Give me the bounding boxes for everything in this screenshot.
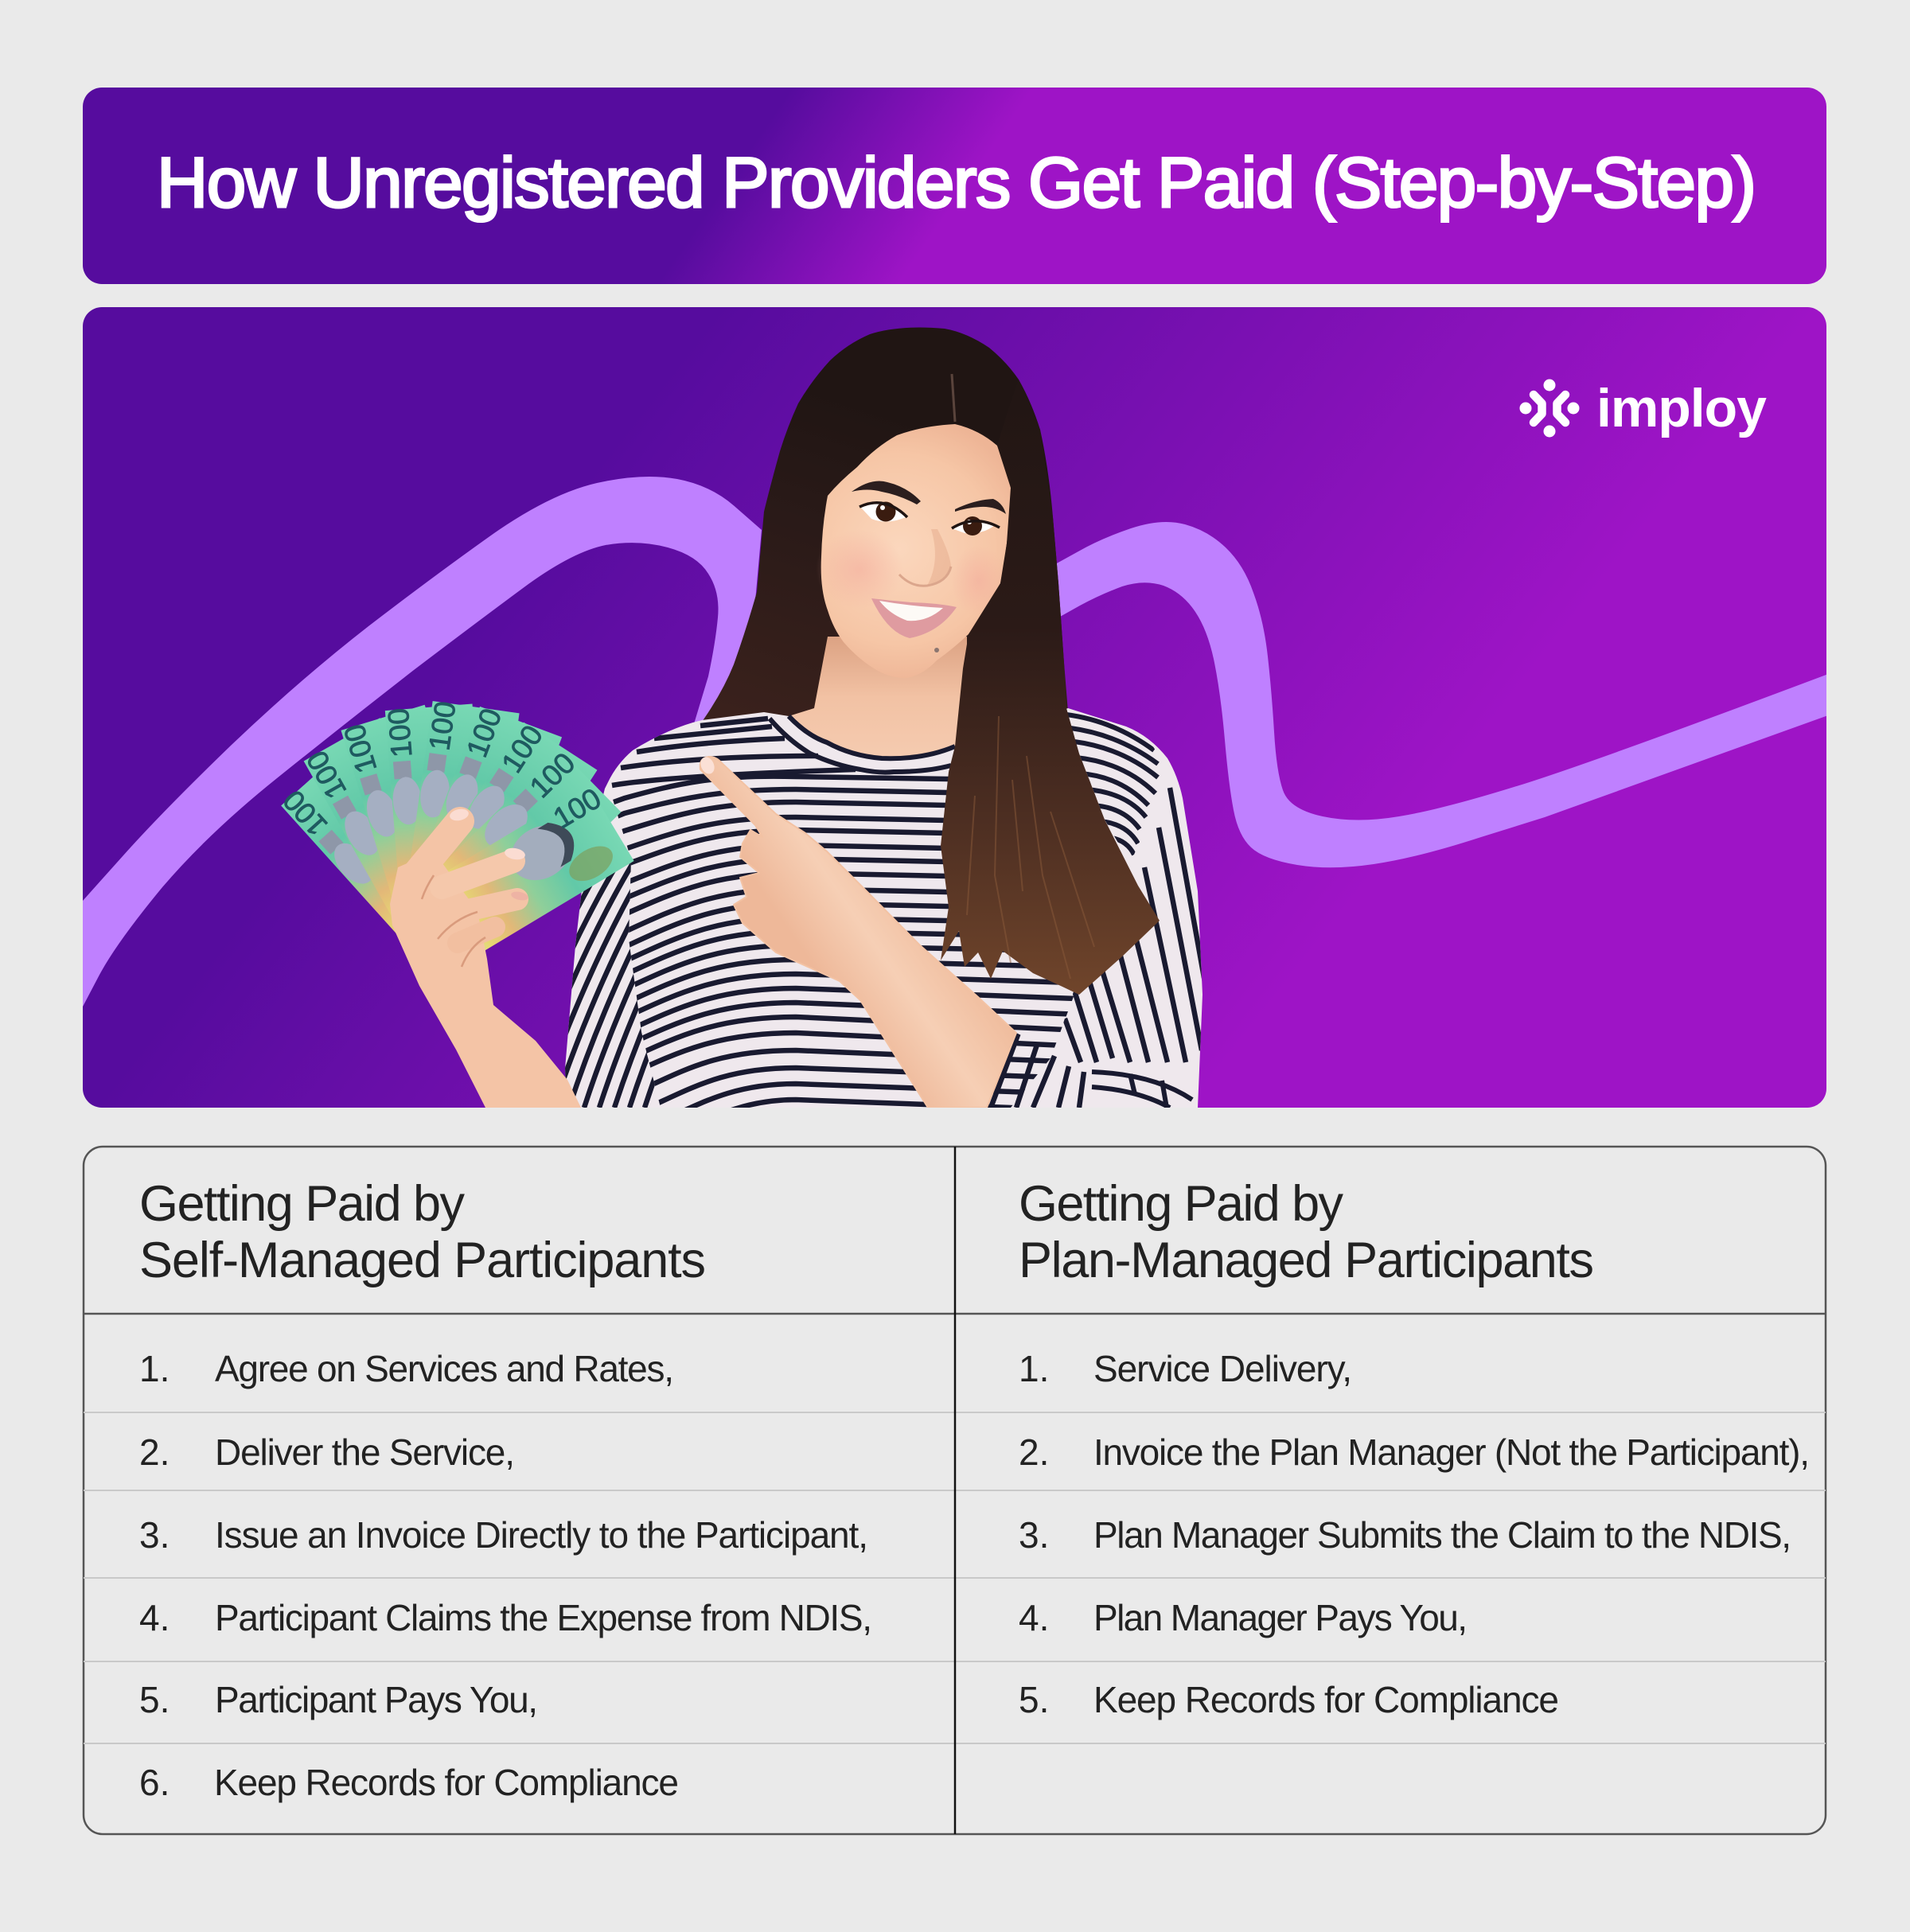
steps: self-managed [139,1348,872,1803]
note 7: 100 [495,719,549,778]
logo wordmark: imploy [1596,378,1767,438]
left sleeve stripes [565,863,655,1108]
note 9: 100 [548,781,606,835]
hand holding notes [390,808,581,1108]
palm and arm [390,851,581,1108]
column heading: plan-managed: Plan-Managed Participants [1019,1233,1594,1288]
steps: plan-managed: 1. [1019,1348,1049,1389]
eyebrows [852,481,921,504]
cuff stripes [991,1033,1084,1108]
steps: plan-managed: Plan Manager Submits the Claim to the NDIS, [1093,1514,1791,1556]
title banner [83,88,1826,284]
note 4: 100 [382,707,418,758]
title: How Unregistered Providers Get Paid (Step-by-Step) [157,142,1756,222]
column heading: self-managed [139,1176,706,1288]
face [816,374,1011,678]
hair part [952,374,955,422]
banknote fan [277,699,637,956]
steps: plan-managed [1019,1348,1810,1720]
steps: plan-managed: 4. [1019,1597,1049,1638]
collar outer stripe [770,719,951,773]
steps: plan-managed: Service Delivery, [1093,1348,1352,1389]
column heading: plan-managed [1019,1176,1594,1288]
column heading: plan-managed: Getting Paid by [1019,1176,1343,1232]
steps: self-managed: Issue an Invoice Directly to the Participant, [215,1514,868,1556]
finger creases [422,875,485,967]
hair: front right lock [941,380,1160,995]
steps: plan-managed: Invoice the Plan Manager (Not the Participant), [1093,1431,1810,1473]
mouth [871,598,957,638]
neck [789,637,967,758]
lower sleeve hem stripes [1092,1072,1192,1108]
steps: self-managed: 3. [139,1514,170,1556]
steps: self-managed: Participant Pays You, [215,1679,538,1720]
steps: self-managed: Agree on Services and Rates, [215,1348,674,1389]
eyes [861,504,906,522]
column heading: self-managed: Getting Paid by [139,1176,465,1232]
note 6: 100 [460,704,508,762]
note 4 [382,703,489,919]
hero panel [83,307,1830,1141]
mole [934,648,939,652]
steps: self-managed: 2. [139,1431,170,1473]
torso stripes [605,719,1098,1141]
note 9 [428,781,637,956]
steps: self-managed: Deliver the Service, [215,1431,515,1473]
note 1 [277,745,473,948]
note 3: 100 [337,720,383,777]
steps: self-managed: Keep Records for Compliance [214,1762,679,1803]
steps: self-managed: Participant Claims the Expense from NDIS, [215,1597,872,1638]
note 2 [300,717,480,939]
note 2: 100 [300,746,353,804]
comparison table [84,1147,1826,1834]
note 3 [337,703,485,929]
note 6 [404,704,563,931]
right sleeve stripes [1065,788,1206,1062]
steps: self-managed: 1. [139,1348,170,1389]
steps: self-managed: 6. [139,1762,170,1803]
hair strands [967,716,1094,979]
steps: plan-managed: Keep Records for Compliance [1093,1679,1559,1720]
column heading: self-managed: Self-Managed Participants [139,1233,706,1288]
steps: plan-managed: Plan Manager Pays You, [1093,1597,1468,1638]
steps: plan-managed: 2. [1019,1431,1049,1473]
ribbon: right curve [1035,522,1830,867]
steps: self-managed: 4. [139,1597,170,1638]
ribbon: left curve [83,477,762,1007]
note 8: 100 [524,746,581,804]
note 5 [400,699,520,921]
photo: woman with money [277,328,1206,1141]
nose [899,529,951,586]
note 1: 100 [277,784,333,842]
fingers [415,821,517,943]
steps: self-managed: 5. [139,1679,170,1720]
note 5: 100 [423,699,462,753]
note 8 [419,746,622,948]
pointing hand and arm [700,757,1016,1108]
collar [789,716,955,758]
logo: imploy [1520,378,1767,438]
striped shirt [565,708,1203,1108]
logo mark [1520,379,1579,438]
note 7 [411,719,598,941]
steps: plan-managed: 5. [1019,1679,1049,1720]
right shoulder stripes [1066,715,1158,855]
pointing finger nail [698,755,717,776]
steps: plan-managed: 3. [1019,1514,1049,1556]
hair back [702,328,1069,722]
finger nails [449,808,529,902]
